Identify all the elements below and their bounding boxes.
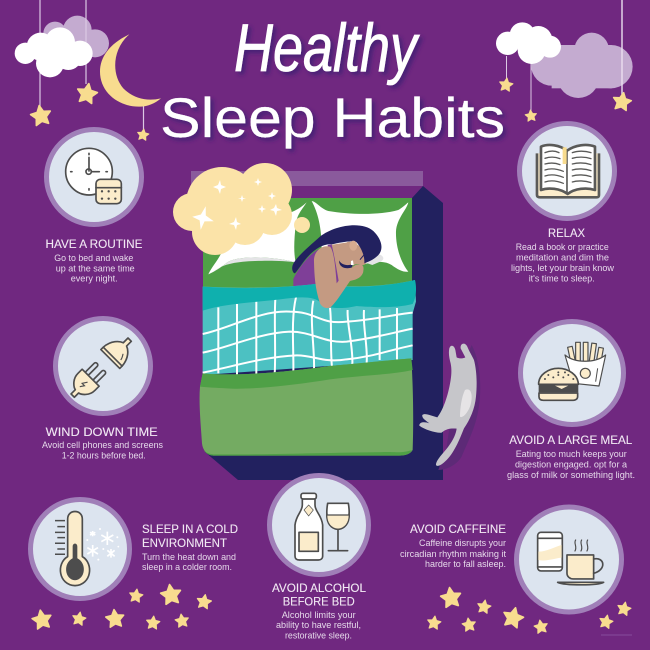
pillows	[208, 201, 408, 274]
bed illustration	[173, 163, 443, 480]
heading	[272, 583, 367, 608]
icon: thermometer and snowflakes	[30, 500, 130, 598]
heading: WIND DOWN TIME	[46, 427, 158, 439]
description: Go to bed and wake	[54, 253, 133, 263]
description: restorative sleep.	[285, 630, 352, 640]
icon: can and coffee cup	[516, 507, 622, 612]
description: digestion engaged. opt for a	[515, 460, 628, 470]
description	[42, 440, 163, 460]
right white cloud	[496, 22, 561, 64]
description: ability to have restful,	[276, 620, 361, 630]
panel: avoid alcohol before bed	[270, 476, 368, 640]
panel: avoid a large meal	[507, 322, 635, 480]
panel: sleep in a cold environment	[30, 500, 238, 598]
description: circadian rhythm making it	[400, 549, 506, 559]
heading: BEFORE BED	[283, 596, 355, 608]
green sheet	[203, 198, 412, 298]
heading: AVOID ALCOHOL	[272, 583, 367, 595]
description: 1-2 hours before bed.	[62, 450, 146, 460]
heading: HAVE A ROUTINE	[46, 239, 143, 251]
panel: have a routine	[46, 130, 143, 284]
heading	[142, 524, 238, 550]
title: Sleep Habits	[160, 86, 505, 149]
left white cloud	[15, 27, 93, 77]
panel: relax	[511, 124, 614, 284]
heading: ENVIRONMENT	[142, 538, 227, 550]
description: Turn the heat down and	[142, 552, 236, 562]
sparkles	[190, 178, 282, 232]
thought cloud	[173, 163, 310, 255]
description	[511, 242, 614, 284]
description	[400, 538, 506, 569]
description: up at the same time	[56, 264, 135, 274]
description: Read a book or practice	[516, 242, 609, 252]
title	[160, 10, 505, 149]
heading: AVOID A LARGE MEAL	[509, 435, 633, 447]
icon: clock and calendar	[46, 130, 142, 224]
stars: bottom right	[427, 586, 632, 634]
description	[54, 253, 135, 284]
mobile: left clouds, moon and stars	[15, 0, 161, 141]
headboard bar	[191, 171, 423, 186]
sleeping woman: torso and head	[292, 225, 381, 292]
heading: SLEEP IN A COLD	[142, 524, 238, 536]
description: meditation and dim the	[516, 252, 609, 262]
description: Avoid cell phones and screens	[42, 440, 163, 450]
cat	[419, 344, 480, 470]
crescent moon	[100, 34, 161, 107]
description: sleep in a colder room.	[142, 562, 232, 572]
description	[507, 449, 635, 480]
description: lights, let your brain know	[511, 263, 614, 273]
panel: wind down time	[42, 318, 163, 460]
description: Alcohol limits your	[282, 610, 356, 620]
icon: plug and socket	[56, 318, 150, 414]
description	[276, 610, 361, 640]
description: Eating too much keeps your	[516, 449, 627, 459]
icon: bottle and wine glass	[270, 476, 368, 574]
right lavender cloud	[531, 33, 633, 98]
icon: burger and fries	[520, 322, 624, 424]
description: glass of milk or something light.	[507, 470, 635, 480]
teal blanket and check pattern	[200, 280, 416, 456]
description: harder to fall asleep.	[425, 559, 506, 569]
title: Healthy	[234, 10, 420, 86]
icon: open book	[520, 124, 614, 218]
blanket foot: green	[200, 358, 413, 456]
sleeping woman: arm over blanket	[314, 246, 364, 308]
heading: AVOID CAFFEINE	[410, 524, 506, 536]
heading: RELAX	[548, 228, 585, 240]
bed frame	[205, 186, 443, 480]
stars: bottom left	[31, 583, 212, 630]
description	[142, 552, 236, 572]
description: it's time to sleep.	[529, 274, 595, 284]
left lavender cloud	[43, 16, 109, 58]
panel: avoid caffeine	[400, 507, 622, 612]
description: every night.	[71, 274, 118, 284]
mobile: right clouds and stars	[496, 0, 633, 121]
description: Caffeine disrupts your	[419, 538, 506, 548]
